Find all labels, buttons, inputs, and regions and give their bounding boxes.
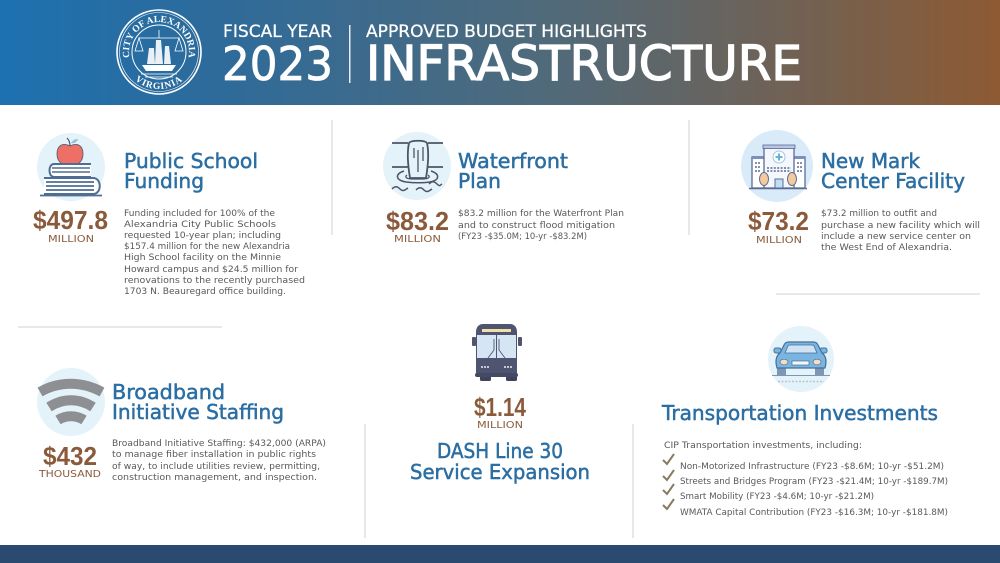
checklist [663, 454, 948, 518]
description [458, 209, 624, 242]
panel: broadband initiative staffing [37, 368, 326, 483]
heading [124, 149, 258, 193]
description: 1703 N. Beauregard office building. [124, 287, 286, 297]
description: construction management, and inspection. [112, 473, 317, 483]
icon: city seal [116, 9, 202, 95]
heading [112, 380, 284, 424]
heading [458, 149, 568, 193]
heading: Waterfront [458, 149, 568, 173]
list items: WMATA Capital Contribution (FY23 -$16.3M; 10-yr -$181.8M) [680, 508, 948, 518]
icon: city seal: VIRGINIA [137, 75, 182, 89]
description: $83.2 million for the Waterfront Plan [458, 209, 624, 219]
fiscal year label: FISCAL YEAR [223, 22, 332, 42]
description: $73.2 million to outfit and [821, 209, 937, 219]
description: Funding included for 100% of the [124, 209, 275, 219]
heading: Initiative Staffing [112, 400, 284, 424]
icon: bus [472, 324, 522, 381]
description: (FY23 -$35.0M; 10-yr -$83.2M) [458, 232, 587, 242]
list items: Streets and Bridges Program (FY23 -$21.4M; 10-yr -$189.7M) [680, 477, 948, 487]
heading [821, 149, 965, 193]
icon: city seal: CITY OF ALEXANDRIA [122, 16, 196, 58]
panel: new mark center facility [741, 130, 980, 253]
unit: MILLION [477, 420, 523, 431]
icon: wifi signal [37, 368, 105, 436]
description: High School facility on the Minnie [124, 253, 281, 263]
description: requested 10-year plan; including [124, 231, 281, 241]
icon: waterfall [383, 132, 451, 200]
panel: waterfront plan [383, 132, 624, 245]
description: purchase a new facility which will [821, 221, 980, 231]
unit: THOUSAND [38, 469, 101, 480]
heading: Broadband [112, 380, 225, 404]
icon: check marks [663, 454, 674, 509]
description: renovations to the recently purchased [124, 276, 305, 286]
icon: car [768, 326, 834, 392]
heading: DASH Line 30 [437, 439, 563, 463]
description: to manage fiber installation in public rights [112, 450, 317, 460]
header banner [0, 0, 1000, 105]
description [821, 209, 980, 253]
heading: Public School [124, 149, 258, 173]
title: INFRASTRUCTURE [366, 36, 802, 92]
year: 2023 [222, 37, 333, 91]
amount: $1.14 [474, 392, 526, 422]
footer bar [0, 545, 1000, 563]
heading: Funding [124, 169, 204, 193]
amount: $83.2 [386, 206, 449, 236]
heading: Service Expansion [410, 460, 590, 484]
amount: $497.8 [33, 205, 108, 235]
description: Howard campus and $24.5 million for [124, 265, 298, 275]
amount: $73.2 [748, 206, 809, 236]
description: include a new service center on [821, 232, 971, 242]
panel: transportation investments [661, 326, 948, 518]
list items: Non-Motorized Infrastructure (FY23 -$8.6M; 10-yr -$51.2M) [680, 462, 944, 472]
heading: New Mark [821, 149, 920, 173]
description: the West End of Alexandria. [821, 243, 952, 253]
unit: MILLION [48, 234, 94, 245]
amount: $432 [43, 441, 97, 471]
panel: public school funding [33, 133, 305, 297]
icon: apple on books [37, 133, 105, 201]
heading: Transportation Investments [661, 401, 938, 425]
panel: dash line 30 [410, 324, 590, 484]
unit: MILLION [394, 234, 441, 245]
description: of way, to include utilities review, permitting, [112, 462, 320, 472]
description: and to construct flood mitigation [458, 221, 615, 231]
description [112, 439, 326, 483]
heading [410, 439, 590, 484]
heading: Plan [458, 169, 501, 193]
list items [680, 462, 948, 518]
budget highlights label: APPROVED BUDGET HIGHLIGHTS [366, 22, 647, 42]
intro text: CIP Transportation investments, including: [664, 441, 862, 451]
description [124, 209, 305, 297]
heading: Center Facility [821, 169, 965, 193]
description: Broadband Initiative Staffing: $432,000 (ARPA) [112, 439, 326, 449]
icon: medical building [741, 130, 813, 202]
description: $157.4 million for the new Alexandria [124, 242, 290, 252]
unit: MILLION [756, 235, 802, 246]
list items: Smart Mobility (FY23 -$4.6M; 10-yr -$21.2M) [680, 492, 874, 502]
description: Alexandria City Public Schools [124, 220, 277, 230]
